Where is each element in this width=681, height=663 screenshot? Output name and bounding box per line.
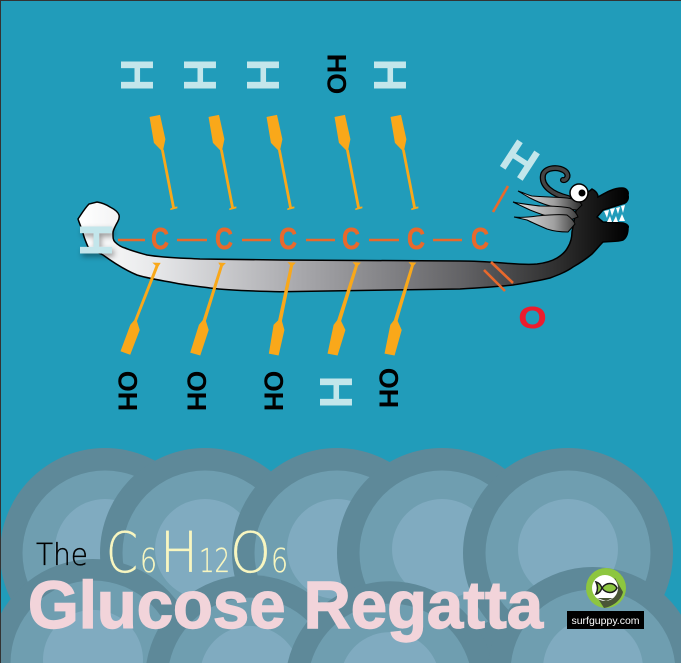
mouth [599,205,626,221]
upper hydrogen labels: H [174,58,226,92]
waves: overlapping scale circles [0,448,681,663]
carbon atoms: C [471,221,489,256]
upper hydrogen labels [111,58,416,92]
formula C6H12O6: 12 [199,541,230,580]
upper hydrogen labels: H [111,58,163,92]
carbon atoms: C [407,221,425,256]
aldehyde oxygen label: O [519,301,546,335]
formula C6H12O6 [106,521,288,586]
lower hydrogen label: H [310,375,362,409]
dragon boat [78,168,628,292]
upper hydrogen labels: H [237,58,289,92]
upper hydroxyl label: HO [322,54,352,94]
aldehyde hydrogen label: H [492,129,548,191]
fin 2 [513,202,578,221]
formula C6H12O6: 6 [140,541,157,580]
fin 1 [518,191,582,210]
bonds [118,186,513,291]
lower hydroxyl labels [112,368,404,411]
lower hydroxyl labels: OH [258,371,288,411]
carbon atoms: C [279,221,297,256]
lower hydroxyl labels: OH [182,371,212,411]
formula C6H12O6: 6 [271,541,288,580]
lower hydroxyl labels: OH [112,371,142,411]
horn curl [543,168,568,198]
teeth [604,205,625,222]
website label: surfguppy.com [571,615,640,627]
carbon atoms: C [215,221,233,256]
boat hull and head [78,188,628,292]
lower oars [121,263,416,355]
carbon chain [118,186,513,291]
formula C6H12O6: O [230,521,271,586]
carbon atoms [151,221,489,256]
title: The: The [36,538,88,573]
stern hydrogen label: H [70,223,122,257]
upper hydrogen labels: H [364,58,416,92]
carbon atoms: C [342,221,360,256]
eye [570,184,588,202]
lower hydroxyl labels: OH [374,368,404,408]
formula C6H12O6: H [160,521,198,586]
formula C6H12O6: C [106,521,138,586]
title: Glucose Regatta: Glucose Regatta [28,568,544,643]
carbon atoms: C [151,221,169,256]
surfguppy logo [567,568,644,629]
logo badge [586,568,626,608]
fin 3 [514,215,575,232]
upper oars [150,115,418,210]
